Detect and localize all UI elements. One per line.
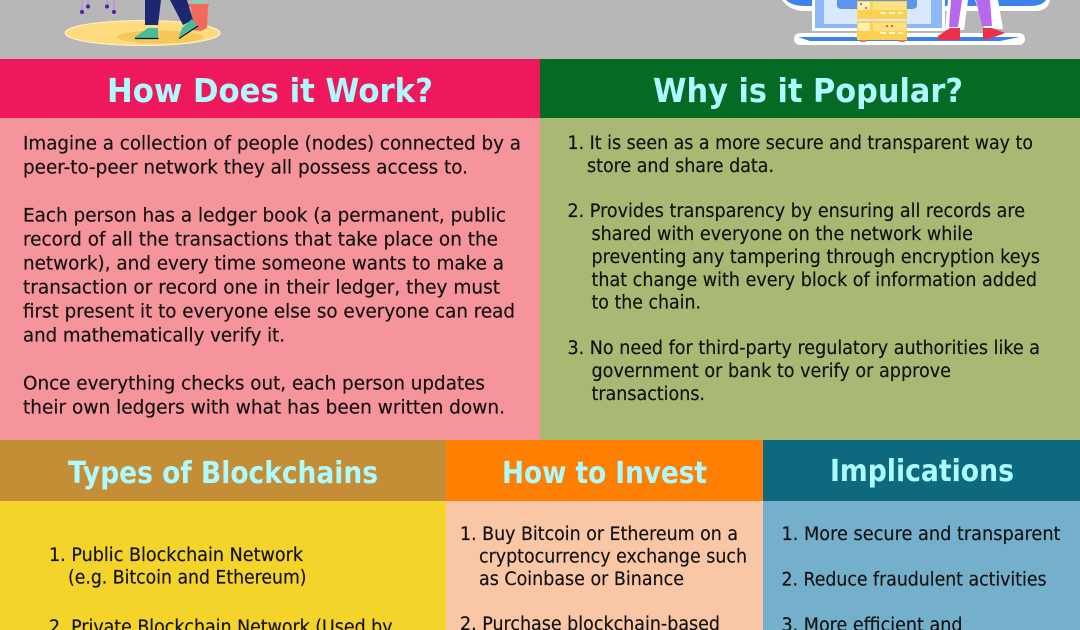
heading: Why is it Popular?: Why is it Popular?	[653, 71, 963, 110]
text block: explanation: record of all the transactions that take place on the	[23, 230, 498, 250]
text block: investment options list: 1. Buy Bitcoin or Ethereum on a	[460, 524, 738, 545]
text block: reasons list: shared with everyone on the network while	[592, 224, 973, 245]
text block: explanation: Each person has a ledger book (a permanent, public	[23, 206, 506, 226]
text block: blockchain types list: (e.g. Bitcoin and Ethereum)	[68, 568, 306, 588]
text block: reasons list	[568, 133, 1040, 405]
panel: Why is it Popular?	[540, 59, 1080, 440]
text block: blockchain types list	[49, 545, 393, 630]
text block: reasons list: store and share data.	[587, 156, 774, 177]
text block: implications list: 1. More secure and transparent	[782, 524, 1060, 545]
text block: reasons list: government or bank to verify or approve	[592, 361, 951, 382]
illustration: person walking with plant	[65, 0, 220, 46]
text block: reasons list: that change with every block of information added	[592, 270, 1037, 291]
text block: explanation: first present it to everyone else so everyone can read	[23, 302, 515, 322]
text block: explanation: peer-to-peer network they all possess access to.	[23, 158, 468, 178]
text block: reasons list: 3. No need for third-party regulatory authorities like a	[568, 338, 1040, 359]
text block: explanation: their own ledgers with what has been written down.	[23, 398, 505, 418]
text block: explanation: Imagine a collection of people (nodes) connected by a	[23, 134, 521, 154]
heading: Types of Blockchains: Types of Blockchains	[68, 456, 378, 491]
panel: How to Invest	[446, 440, 763, 630]
text block: reasons list: transactions.	[592, 384, 705, 405]
text block: investment options list: as Coinbase or Binance	[479, 569, 684, 590]
text block: reasons list: 1. It is seen as a more secure and transparent way to	[568, 133, 1033, 154]
text block: reasons list: preventing any tampering through encryption keys	[592, 247, 1040, 268]
heading: How to Invest: How to Invest	[502, 456, 707, 491]
heading: How Does it Work?: How Does it Work?	[107, 71, 433, 110]
panel: How Does it Work?	[0, 59, 540, 440]
text block: investment options list	[460, 524, 747, 630]
text block: reasons list: to the chain.	[592, 292, 701, 314]
text block: explanation: network), and every time someone wants to make a	[23, 254, 504, 274]
panel: Types of Blockchains	[0, 440, 446, 630]
illustration: monitor with server racks	[782, 0, 1050, 45]
text block: reasons list: 2. Provides transparency by ensuring all records are	[568, 201, 1025, 222]
text block: investment options list: cryptocurrency exchange such	[479, 546, 747, 568]
text block: explanation: Once everything checks out, each person updates	[23, 374, 485, 394]
text block: implications list: 2. Reduce fraudulent activities	[782, 570, 1046, 590]
text block: explanation: transaction or record one in their ledger, they must	[23, 278, 500, 298]
text block: blockchain types list: 1. Public Blockchain Network	[49, 545, 303, 566]
text block: explanation: and mathematically verify it.	[23, 326, 285, 346]
panel: Implications	[763, 440, 1080, 630]
text block: implications list	[782, 524, 1060, 630]
text block: explanation	[23, 134, 521, 418]
heading: Implications: Implications	[830, 454, 1014, 489]
